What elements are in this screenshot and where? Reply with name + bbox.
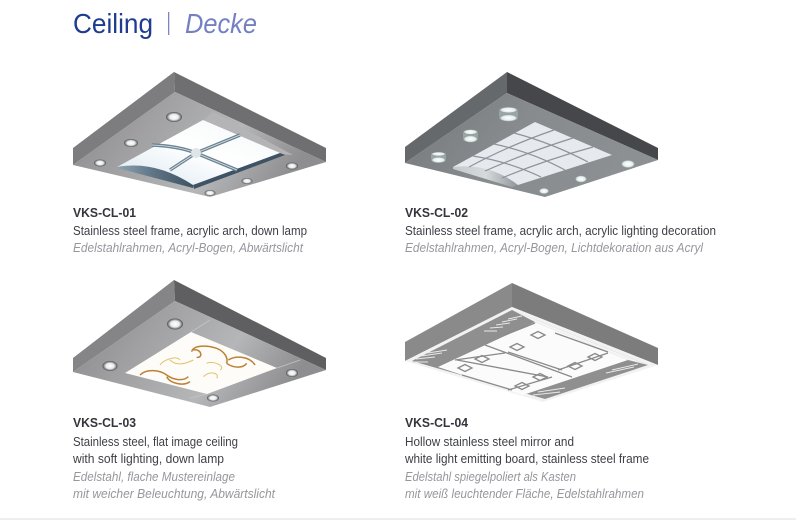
- text: VKS-CL-03: [72, 416, 276, 501]
- text: VKS-CL-03: VKS-CL-03: [73, 416, 136, 430]
- panel: VKS-CL-01: [73, 72, 326, 255]
- panel: VKS-CL-02: [405, 72, 716, 255]
- text: VKS-CL-04: mit weiß leuchtender Fläche, Edelstahlrahmen: [405, 487, 644, 501]
- text: VKS-CL-04: [404, 416, 649, 501]
- text: VKS-CL-03: Edelstahl, flache Mustereinlage: [73, 470, 235, 484]
- text: VKS-CL-02: VKS-CL-02: [405, 206, 468, 220]
- text: VKS-CL-02: [405, 206, 716, 255]
- text: VKS-CL-04: Hollow stainless steel mirror and: [405, 435, 574, 449]
- title: Decke: [185, 8, 257, 39]
- title: [73, 8, 257, 39]
- ceiling image 01: [73, 72, 326, 197]
- panel: VKS-CL-03: [72, 280, 326, 501]
- panel: VKS-CL-04: [404, 283, 658, 501]
- text: VKS-CL-04: VKS-CL-04: [405, 416, 468, 430]
- text: VKS-CL-01: Edelstahlrahmen, Acryl-Bogen, Abwärtslicht: [73, 241, 303, 255]
- ceiling image 03: [73, 280, 326, 407]
- text: VKS-CL-03: with soft lighting, down lamp: [72, 452, 224, 466]
- text: VKS-CL-03: mit weicher Beleuchtung, Abwärtslicht: [73, 487, 276, 501]
- text: VKS-CL-02: Stainless steel frame, acrylic arch, acrylic lighting decoration: [405, 224, 716, 238]
- title: Ceiling: [73, 8, 153, 39]
- text: VKS-CL-03: Stainless steel, flat image ceiling: [73, 435, 238, 449]
- text: VKS-CL-04: white light emitting board, stainless steel frame: [404, 452, 649, 466]
- text: VKS-CL-04: Edelstahl spiegelpoliert als Kasten: [405, 470, 576, 484]
- text: VKS-CL-01: [73, 206, 307, 255]
- ceiling image 04: [405, 283, 658, 402]
- ceiling image 02: [405, 72, 658, 197]
- text: VKS-CL-02: Edelstahlrahmen, Acryl-Bogen, Lichtdekoration aus Acryl: [405, 241, 704, 255]
- text: VKS-CL-01: Stainless steel frame, acrylic arch, down lamp: [73, 224, 307, 238]
- text: VKS-CL-01: VKS-CL-01: [73, 206, 136, 220]
